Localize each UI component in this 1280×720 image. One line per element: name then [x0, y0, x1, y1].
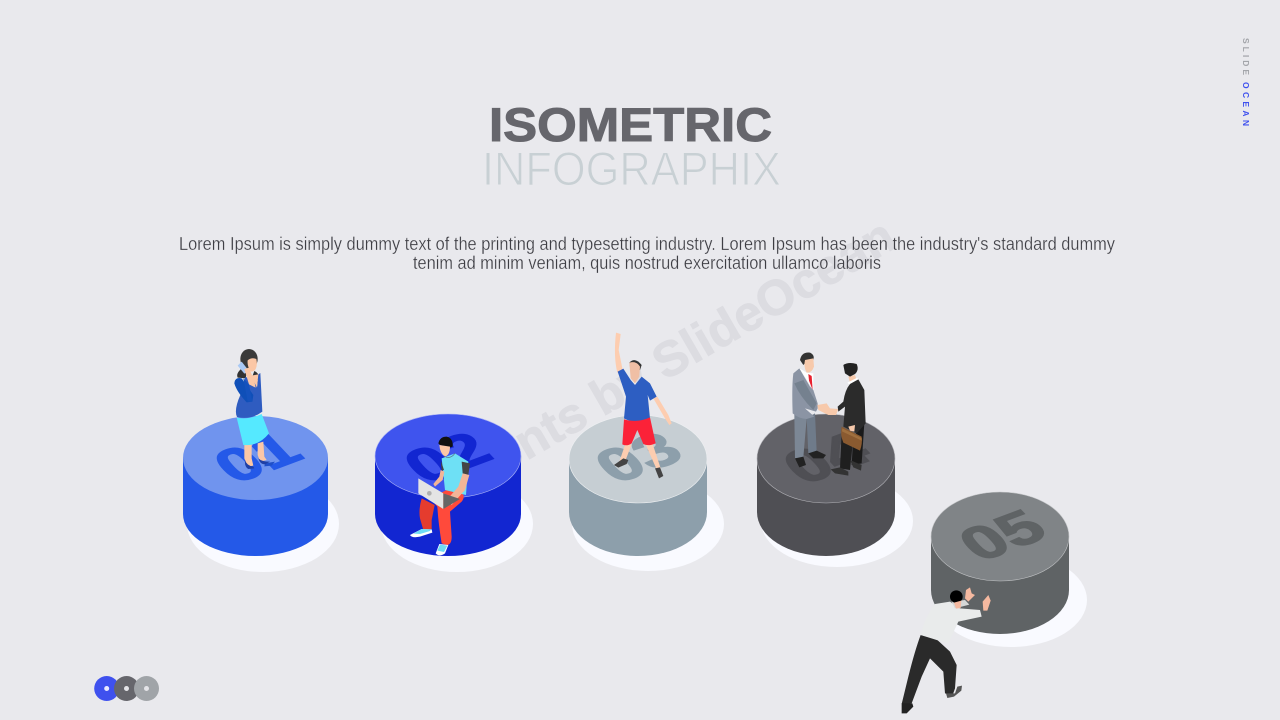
figure: man with laptop	[410, 437, 470, 555]
figure: businessmen shaking hands	[792, 353, 866, 476]
number 01: 01	[201, 422, 314, 493]
left businessman	[792, 353, 838, 467]
cylinder 03	[569, 415, 724, 571]
cylinder 02	[375, 414, 533, 572]
title line: infographix: INFOGRAPHIX	[482, 142, 781, 195]
right businessman	[831, 363, 866, 476]
description text: tenim ad minim veniam, quis nostrud exercitation ullamco laboris	[413, 253, 881, 273]
title	[482, 98, 781, 195]
cylinder 05	[931, 492, 1087, 647]
number 03: 03	[582, 422, 695, 493]
figure: man waving	[614, 333, 672, 478]
watermark: Contents by SlideOcean	[383, 208, 904, 541]
brand label: slide ocean: SLIDE	[1241, 38, 1251, 75]
description text	[179, 234, 1115, 273]
number 02: 02	[391, 422, 504, 493]
brand label: slide ocean: OCEAN	[1241, 82, 1251, 126]
brand label: slide ocean	[1241, 38, 1251, 126]
cylinder 04	[757, 414, 913, 567]
number 05: 05	[946, 500, 1059, 571]
cylinder 01	[183, 416, 339, 572]
title line: isometric: ISOMETRIC	[489, 98, 772, 151]
pagination dots	[94, 676, 159, 701]
figure: man pushing cylinder	[902, 587, 991, 713]
number 04: 04	[770, 423, 884, 494]
figure: woman on phone	[234, 349, 275, 469]
description text: Lorem Ipsum is simply dummy text of the printing and typesetting industry. Lorem Ipsum has been the industry's standard dummy	[179, 234, 1115, 254]
